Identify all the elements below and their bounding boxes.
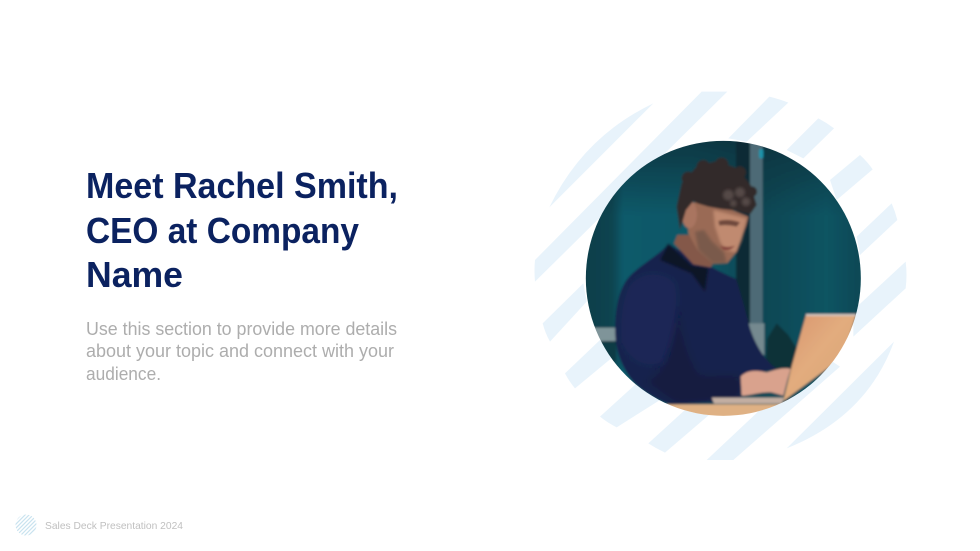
- dark pillar: [736, 135, 750, 325]
- hair: [677, 158, 757, 230]
- neck: [674, 235, 716, 267]
- sweater: [615, 244, 777, 404]
- description text: about your topic and connect with your: [86, 340, 394, 361]
- collar: [660, 244, 708, 292]
- portrait photo: [580, 135, 870, 425]
- mouth: [720, 246, 735, 250]
- stubble: [695, 230, 727, 264]
- sweater shadow: [653, 314, 740, 404]
- description text: Use this section to provide more details: [86, 318, 397, 339]
- table: [666, 402, 781, 416]
- window lower: [748, 323, 764, 355]
- sweater highlight: [621, 275, 676, 364]
- title: CEO at Company: [86, 210, 359, 251]
- eye shade: [718, 220, 740, 227]
- hands: [741, 368, 791, 396]
- grey ledge: [593, 328, 616, 341]
- teal wall: [586, 140, 861, 406]
- title: Name: [86, 254, 183, 295]
- footer logo: [16, 514, 36, 536]
- dark plant: [766, 324, 797, 370]
- hair highlights: [723, 187, 750, 207]
- ear: [682, 200, 697, 228]
- laptop lid: [783, 315, 856, 401]
- striped circle backdrop: [534, 92, 906, 460]
- laptop base: [712, 398, 784, 404]
- description text: [86, 318, 397, 384]
- footer text: Sales Deck Presentation 2024: [45, 520, 183, 532]
- dark lower ledge: [605, 342, 616, 361]
- wall shade: [616, 141, 833, 202]
- title: [86, 165, 398, 295]
- blue light: [759, 149, 763, 158]
- face: [687, 198, 748, 264]
- laptop lid edge: [806, 314, 856, 316]
- description text: audience.: [86, 363, 161, 384]
- lit face: [713, 210, 747, 252]
- grey pillar: [750, 142, 763, 355]
- title: Meet Rachel Smith,: [86, 165, 398, 206]
